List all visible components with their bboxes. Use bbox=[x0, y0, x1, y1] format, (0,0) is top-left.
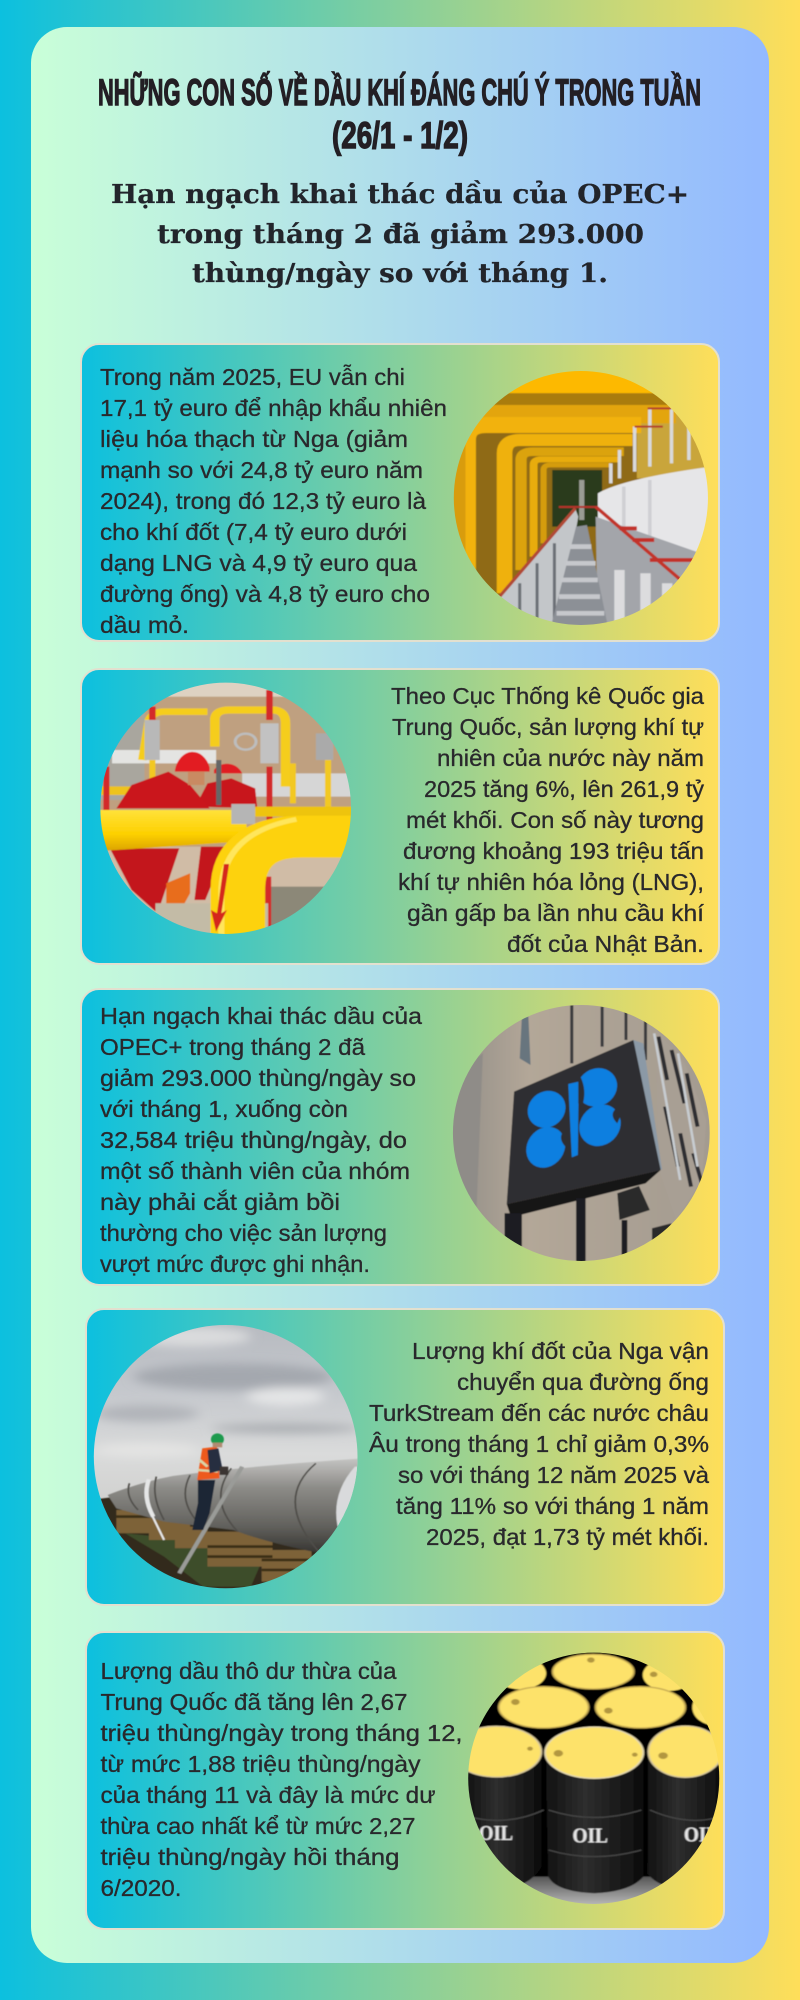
card 3 text: một số thành viên của nhóm bbox=[100, 1158, 410, 1184]
card 1 text: dầu mỏ. bbox=[100, 612, 189, 638]
title bbox=[98, 71, 701, 156]
card 5 text bbox=[100, 1658, 462, 1901]
panel: card 4 TurkStream bbox=[86, 1309, 724, 1605]
card 3 text bbox=[100, 1003, 423, 1277]
card 1 text: Trong năm 2025, EU vẫn chi bbox=[100, 364, 405, 390]
card 1 background bbox=[81, 344, 719, 641]
barrel labels: OIL bbox=[479, 1821, 513, 1845]
card 4 text: so với tháng 12 năm 2025 và bbox=[398, 1462, 710, 1488]
barrel labels bbox=[479, 1825, 710, 1844]
card 3 background bbox=[81, 989, 719, 1285]
card 2 background bbox=[81, 669, 719, 964]
card 2 text: nhiên của nước này năm bbox=[437, 745, 704, 771]
card 3 text: OPEC+ trong tháng 2 đã bbox=[100, 1034, 366, 1060]
card 3 text: 32,584 triệu thùng/ngày, do bbox=[100, 1127, 407, 1153]
barrel labels: OIL bbox=[572, 1824, 608, 1847]
card 1 text bbox=[100, 364, 447, 638]
card 4 background bbox=[86, 1309, 724, 1605]
card 2 text: gần gấp ba lần nhu cầu khí bbox=[407, 900, 704, 926]
card 3 text: giảm 293.000 thùng/ngày so bbox=[100, 1065, 416, 1091]
card 3 text: Hạn ngạch khai thác dầu của bbox=[100, 1003, 423, 1029]
card 4 text: tăng 11% so với tháng 1 năm bbox=[396, 1493, 709, 1519]
card 3 text: với tháng 1, xuống còn bbox=[100, 1096, 348, 1122]
card 4 text bbox=[369, 1338, 710, 1550]
panel: card 5 China crude surplus bbox=[86, 1632, 740, 1929]
card 2 text: Trung Quốc, sản lượng khí tự bbox=[392, 714, 704, 740]
card 1 text: 2024), trong đó 12,3 tỷ euro là bbox=[100, 488, 427, 514]
card 4 text: 2025, đạt 1,73 tỷ mét khối. bbox=[426, 1524, 709, 1550]
card 2 text bbox=[391, 683, 705, 957]
barrel labels: OIL bbox=[684, 1823, 719, 1846]
card 2 text: 2025 tăng 6%, lên 261,9 tỷ bbox=[424, 776, 704, 802]
card 5 text: triệu thùng/ngày hồi tháng bbox=[100, 1844, 400, 1870]
card 1 text: đường ống) và 4,8 tỷ euro cho bbox=[100, 581, 430, 607]
card 4 text: Lượng khí đốt của Nga vận bbox=[412, 1338, 709, 1364]
card 3 text: này phải cắt giảm bồi bbox=[100, 1189, 340, 1215]
photo: black oil barrels with yellow lids bbox=[468, 1652, 720, 1904]
card 1 text: 17,1 tỷ euro để nhập khẩu nhiên bbox=[100, 395, 447, 421]
photo: OPEC sign on building bbox=[450, 1003, 715, 1263]
card 3 text: thường cho việc sản lượng bbox=[100, 1220, 387, 1246]
card 5 text: triệu thùng/ngày trong tháng 12, bbox=[100, 1720, 462, 1746]
card 4 text: TurkStream đến các nước châu bbox=[369, 1400, 709, 1426]
photo: workers at yellow pipes bbox=[97, 680, 359, 940]
card 5 text: 6/2020. bbox=[100, 1875, 182, 1901]
subtitle: Hạn ngạch khai thác dầu của OPEC+ bbox=[111, 179, 689, 210]
card 5 text: Lượng dầu thô dư thừa của bbox=[100, 1658, 397, 1684]
card 5 text: từ mức 1,88 triệu thùng/ngày bbox=[100, 1751, 421, 1777]
card 5 text: Trung Quốc đã tăng lên 2,67 bbox=[100, 1689, 408, 1715]
card 2 text: đốt của Nhật Bản. bbox=[507, 931, 704, 957]
card 4 text: chuyển qua đường ống bbox=[457, 1369, 709, 1395]
subtitle: thùng/ngày so với tháng 1. bbox=[192, 258, 608, 289]
card 1 text: liệu hóa thạch từ Nga (giảm bbox=[100, 426, 408, 452]
card 1 text: cho khí đốt (7,4 tỷ euro dưới bbox=[100, 519, 407, 545]
card 2 text: Theo Cục Thống kê Quốc gia bbox=[391, 683, 705, 709]
card 2 text: mét khối. Con số này tương bbox=[406, 807, 704, 833]
card 3 text: vượt mức được ghi nhận. bbox=[100, 1251, 370, 1277]
panel: card 1 EU imports bbox=[81, 344, 719, 641]
card 2 text: đương khoảng 193 triệu tấn bbox=[403, 838, 704, 864]
photo: worker on pipeline bbox=[90, 1323, 361, 1593]
card 5 text: thừa cao nhất kể từ mức 2,27 bbox=[100, 1813, 416, 1839]
card 4 text: Âu trong tháng 1 chỉ giảm 0,3% bbox=[369, 1431, 709, 1457]
panel: card 2 China gas output bbox=[81, 669, 719, 964]
card 5 background bbox=[86, 1632, 724, 1929]
card 5 text: của tháng 11 và đây là mức dư bbox=[100, 1782, 436, 1808]
title: (26/1 - 1/2) bbox=[332, 115, 468, 156]
subtitle: trong tháng 2 đã giảm 293.000 bbox=[157, 219, 644, 250]
photo: yellow gas pipes and walkway bbox=[450, 368, 711, 630]
card 1 text: mạnh so với 24,8 tỷ euro năm bbox=[100, 457, 423, 483]
subtitle bbox=[111, 179, 689, 289]
card 1 text: dạng LNG và 4,9 tỷ euro qua bbox=[100, 550, 418, 576]
panel: card 3 OPEC+ quota bbox=[81, 989, 719, 1285]
card 2 text: khí tự nhiên hóa lỏng (LNG), bbox=[398, 869, 704, 895]
